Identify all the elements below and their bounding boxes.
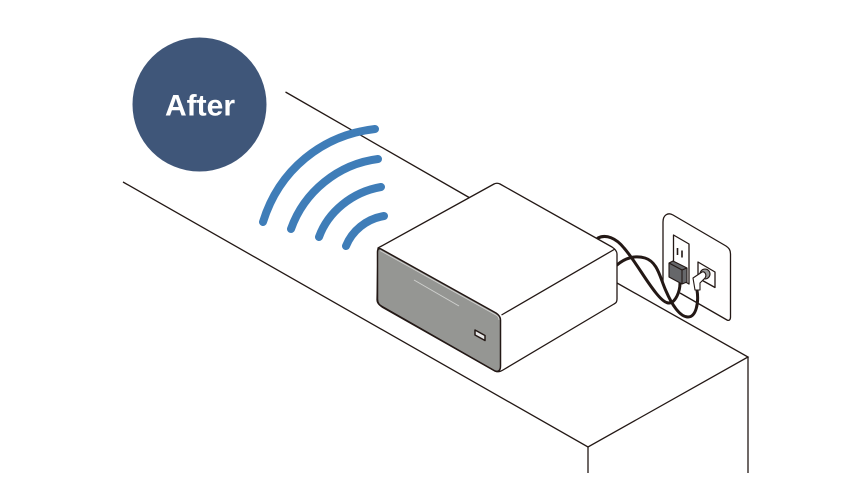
- desk: [123, 92, 748, 473]
- plug: white angled connector: [693, 269, 710, 290]
- panel highlight: [414, 280, 459, 306]
- outlet slots: [678, 248, 682, 258]
- device front panel: [378, 249, 500, 371]
- power cables: [598, 236, 698, 317]
- badge: After: [132, 38, 266, 172]
- wall plate with outlets: [663, 214, 730, 320]
- device: box: [377, 183, 617, 372]
- outlet: upper: [674, 235, 689, 284]
- device top edges: [502, 249, 615, 315]
- panel top edge highlight: [380, 250, 499, 320]
- badge: After: After: [165, 90, 235, 122]
- icon: usb port: [475, 330, 485, 340]
- icon: wireless signal waves: [263, 129, 384, 246]
- plug: grey adapter: [669, 261, 687, 284]
- outlet: lower: [698, 262, 715, 288]
- device body: [377, 183, 617, 372]
